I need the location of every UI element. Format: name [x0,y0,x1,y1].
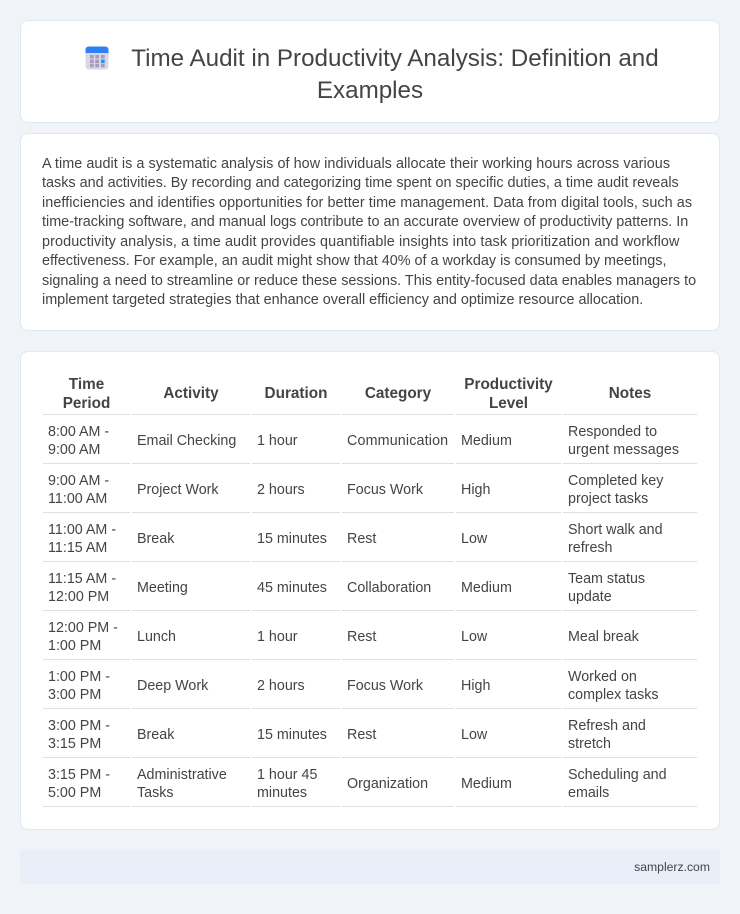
table row: 8:00 AM email checking: Responded to [568,424,657,440]
text block: definition: effectiveness. For example, an audit might show that 40% of a workday is consumed by meetings, [42,253,666,269]
text block: definition: tasks and activities. By recording and categorizing time spent on specific duties, a time audit reveals [42,175,679,191]
table row: 8:00 AM email checking [48,424,679,458]
title [131,45,659,104]
panel: title card [20,20,720,123]
table row: 11:00 AM break: Rest [347,531,376,547]
table row: 1:00 PM deep work: Worked on [568,669,637,685]
table row: 12:00 PM lunch: 1:00 PM [48,638,101,654]
table row: 9:00 AM project work: 11:00 AM [48,491,107,507]
table row: 11:00 AM break: refresh [568,540,612,556]
table row: 3:15 PM administrative tasks: Organization [347,776,428,792]
table row: 12:00 PM lunch: Lunch [137,629,176,645]
table row: 9:00 AM project work: High [461,482,490,498]
table row: 1:00 PM deep work: 1:00 PM - [48,669,110,685]
table row: 1:00 PM deep work [48,669,659,703]
text block: definition: inefficiencies and identifies opportunities for better time management. Data from digital tools, such as [42,194,692,210]
footer bar [20,850,720,884]
text block: definition [42,156,696,308]
table header: Duration [265,385,327,402]
table row: 9:00 AM project work: Project Work [137,482,219,498]
table row: 8:00 AM email checking: Email Checking [137,433,236,449]
table header: Time [69,376,104,393]
table row: 8:00 AM email checking: 9:00 AM [48,442,100,458]
table header: Productivity [464,376,553,393]
table row: 3:00 PM break: stretch [568,736,611,752]
table row: 9:00 AM project work: project tasks [568,491,648,507]
table row: 3:00 PM break: 3:15 PM [48,736,101,752]
table row: 3:15 PM administrative tasks: Tasks [137,785,174,801]
table row: 8:00 AM email checking: 1 hour [257,433,298,449]
table row: 8:00 AM email checking: Communication [347,433,448,449]
title: Examples [317,77,423,104]
table row: 3:15 PM administrative tasks: minutes [257,785,307,801]
table row: 12:00 PM lunch [48,620,639,654]
table grid lines [43,414,697,807]
table row: 11:00 AM break: Low [461,531,487,547]
panel: definition text [20,133,720,331]
panel: time audit table [20,351,720,830]
icon: calendar [86,46,108,70]
table row: 11:00 AM break: 11:00 AM - [48,522,116,538]
table row: 11:15 AM meeting [48,571,645,605]
table row: 9:00 AM project work: Completed key [568,473,663,489]
table row: 11:00 AM break: 15 minutes [257,531,327,547]
table row: 8:00 AM email checking: 8:00 AM - [48,424,109,440]
table row: 12:00 PM lunch: Low [461,629,487,645]
table row: 3:15 PM administrative tasks: Scheduling and [568,767,667,783]
table row: 3:15 PM administrative tasks: 3:15 PM - [48,767,110,783]
table row: 1:00 PM deep work: 3:00 PM [48,687,101,703]
text block: definition: signaling a need to streamline or reduce these sessions. This entity-focused data enables managers to [42,272,696,288]
table row: 3:15 PM administrative tasks: emails [568,785,609,801]
table row: 11:00 AM break: 11:15 AM [48,540,107,556]
text block: definition: time-tracking software, and manual logs contribute to an accurate overview of productivity patterns. In [42,214,688,230]
table row: 11:15 AM meeting: update [568,589,612,605]
table row: 3:00 PM break: Refresh and [568,718,646,734]
table row: 1:00 PM deep work: 2 hours [257,678,305,694]
text block: definition: A time audit is a systematic analysis of how individuals allocate their working hours across various [42,156,670,172]
table row: 12:00 PM lunch: 12:00 PM - [48,620,118,636]
table header: Level [489,395,528,412]
table row: 3:15 PM administrative tasks: Administrative [137,767,227,783]
table row: 3:00 PM break: 15 minutes [257,727,327,743]
table row: 11:00 AM break [48,522,663,556]
table row: 8:00 AM email checking: Medium [461,433,512,449]
table row: 1:00 PM deep work: Focus Work [347,678,423,694]
table row: 11:15 AM meeting: 12:00 PM [48,589,109,605]
table row: 11:15 AM meeting: Meeting [137,580,188,596]
table row: 3:00 PM break: Rest [347,727,376,743]
table header [63,376,651,412]
table row: 3:15 PM administrative tasks: Medium [461,776,512,792]
table row: 9:00 AM project work: 9:00 AM - [48,473,109,489]
table row: 1:00 PM deep work: Deep Work [137,678,208,694]
text block: definition: productivity analysis, a time audit provides quantifiable insights into task prioritization and workflow [42,234,680,250]
table row: 3:00 PM break: Low [461,727,487,743]
table row: 12:00 PM lunch: 1 hour [257,629,298,645]
table row: 9:00 AM project work: Focus Work [347,482,423,498]
table header: Period [63,395,110,412]
table row: 12:00 PM lunch: Rest [347,629,376,645]
table row: 11:15 AM meeting: 11:15 AM - [48,571,116,587]
title: Time Audit in Productivity Analysis: Definition and [131,45,659,72]
table row: 3:00 PM break: 3:00 PM - [48,718,110,734]
table header: Notes [609,385,651,402]
table row: 8:00 AM email checking: urgent messages [568,442,679,458]
table row: 3:15 PM administrative tasks: 1 hour 45 [257,767,317,783]
table row: 9:00 AM project work [48,473,664,507]
table row: 3:00 PM break [48,718,646,752]
table row: 12:00 PM lunch: Meal break [568,629,639,645]
table row: 3:15 PM administrative tasks: 5:00 PM [48,785,101,801]
text block: definition: implement targeted strategies that enhance overall efficiency and optimize resource allocation. [42,292,643,308]
table row: 11:15 AM meeting: Collaboration [347,580,431,596]
table row: 11:00 AM break: Short walk and [568,522,663,538]
table row: 11:15 AM meeting: Team status [568,571,645,587]
table row: 11:00 AM break: Break [137,531,174,547]
table header: Activity [163,385,219,402]
table row: 3:00 PM break: Break [137,727,174,743]
table row: 11:15 AM meeting: 45 minutes [257,580,327,596]
table row: 1:00 PM deep work: High [461,678,490,694]
table header: Category [365,385,431,402]
footer text: samplerz.com [634,860,710,874]
table row: 9:00 AM project work: 2 hours [257,482,305,498]
table row: 3:15 PM administrative tasks [48,767,667,801]
table row: 11:15 AM meeting: Medium [461,580,512,596]
table row: 1:00 PM deep work: complex tasks [568,687,659,703]
